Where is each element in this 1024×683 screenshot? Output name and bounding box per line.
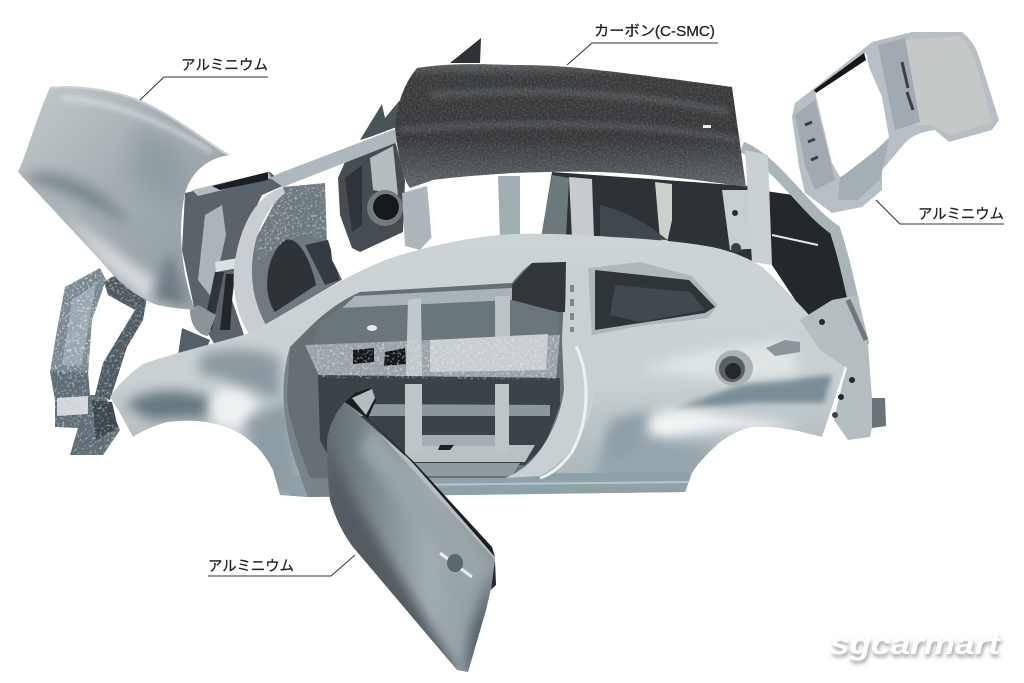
engine bay: [178, 172, 285, 355]
far rear interior: [540, 172, 770, 262]
far side B-pillar: [402, 186, 432, 250]
far side spikes behind roof: [360, 38, 481, 140]
hood panel: [18, 86, 230, 310]
carbon roof panel: [395, 64, 746, 188]
door panel: [327, 402, 495, 672]
B-pillar frame: [505, 262, 594, 478]
front radiator support structure: [50, 268, 147, 455]
far pillar: [498, 176, 520, 240]
door handle: [440, 553, 472, 577]
callout: hood aluminium: アルミニウム: [181, 57, 268, 74]
far side wheel arch area: [247, 183, 345, 325]
window opening rear: [520, 176, 552, 243]
rear end structure: [800, 295, 886, 440]
rear quarter shading: [590, 340, 832, 495]
rear quarter window: [588, 262, 718, 336]
callout: roof carbon: [567, 23, 718, 65]
callout: door aluminium: [208, 555, 355, 576]
fender shading: [125, 350, 300, 495]
front door jamb: [283, 347, 330, 497]
callout: tailgate aluminium: アルミニウム: [918, 206, 1004, 223]
cabin interior floor: [287, 262, 567, 478]
window opening front: [325, 170, 432, 285]
far side roof rail: [270, 129, 398, 187]
callout: roof carbon: カーボン(C-SMC): [594, 23, 715, 40]
callout: tailgate aluminium: [876, 200, 1004, 224]
far door inner: [338, 140, 405, 252]
callout: door aluminium: アルミニウム: [208, 558, 294, 575]
rear quarter details: fuel door and tail lamp opening: [715, 340, 800, 386]
roof strip pale line: [772, 235, 818, 245]
rear pillar: [745, 150, 772, 265]
window opening middle: [427, 176, 503, 245]
door frame dark edge: [345, 388, 496, 590]
rear structure strip: [742, 147, 864, 345]
side body panel: [110, 234, 845, 497]
far side A-pillar: [234, 187, 285, 335]
tailgate: [792, 32, 999, 213]
sill: [290, 472, 690, 497]
watermark logo: sgcarmart: [830, 626, 1002, 661]
rear wheel arch inner: [759, 190, 862, 340]
callout: hood aluminium: [140, 57, 268, 100]
